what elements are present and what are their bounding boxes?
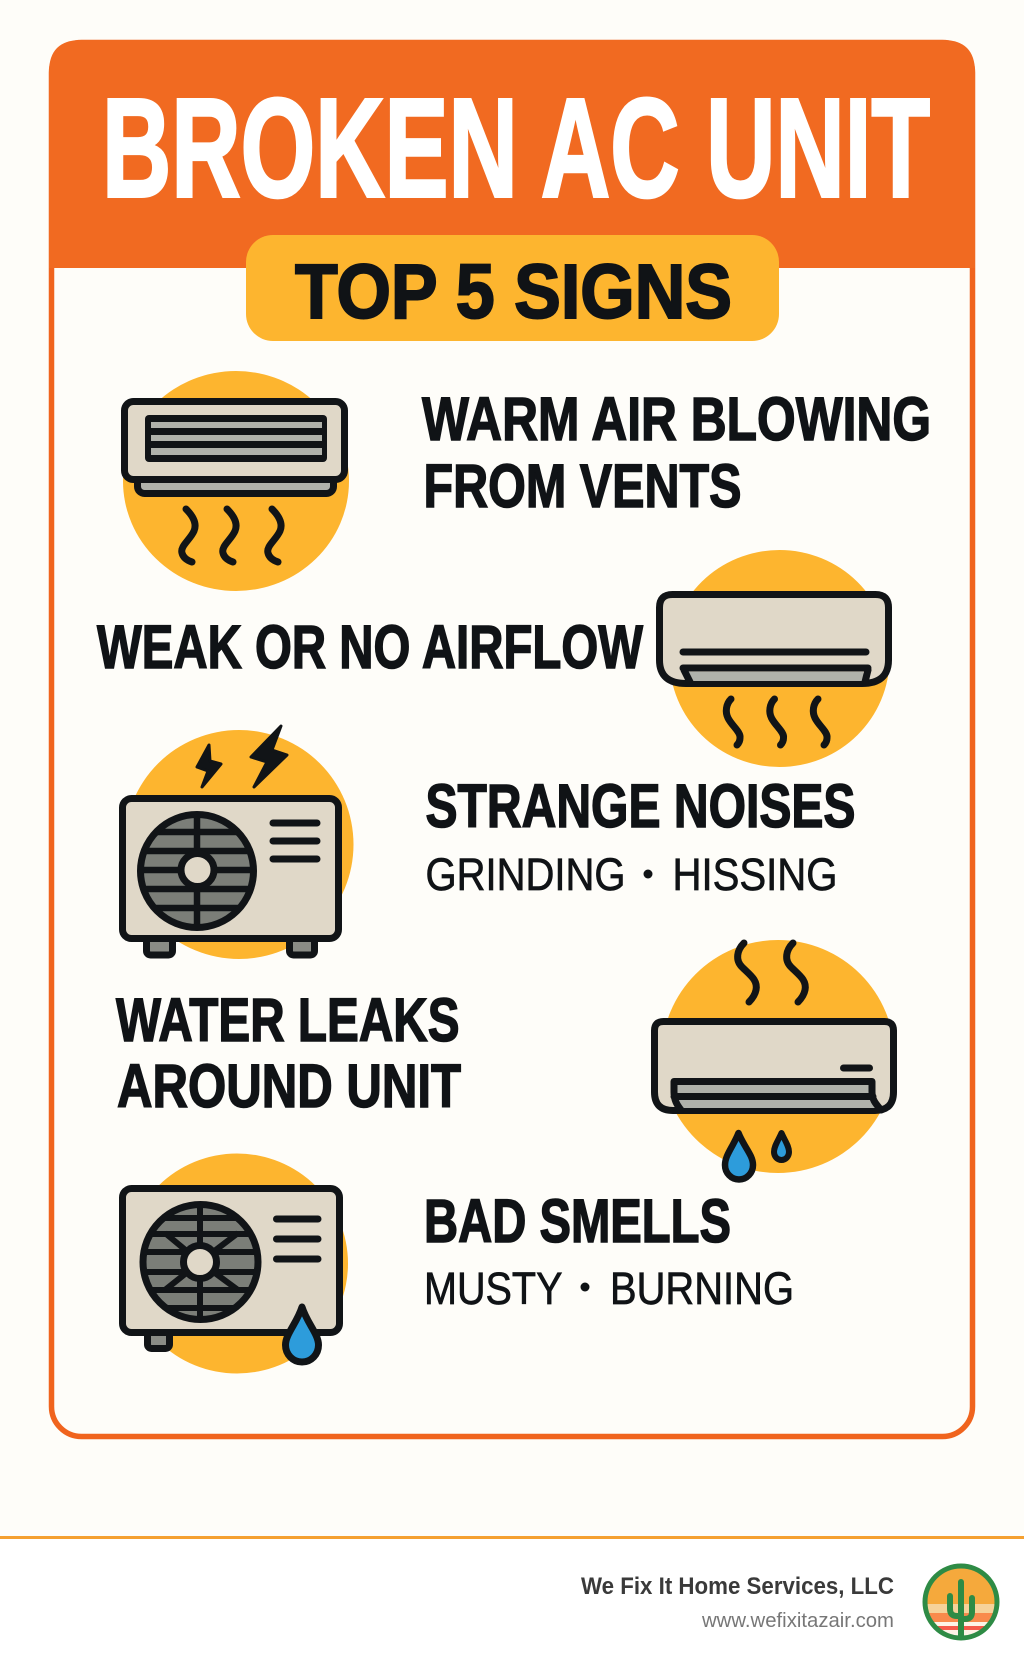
icon: outdoor unit with lightning — [122, 726, 354, 959]
subtitle pill — [246, 235, 779, 341]
detail: musty, burning — [424, 1263, 794, 1314]
icon: outdoor unit with drip — [122, 1154, 348, 1374]
heading: bad smells: BAD SMELLS — [424, 1187, 731, 1255]
detail: musty, burning: BURNING — [610, 1263, 794, 1314]
icon: indoor unit with weak airflow — [660, 550, 890, 767]
icon: indoor unit with leaks — [654, 940, 894, 1180]
heading: warm air: FROM VENTS — [424, 452, 742, 520]
detail: grinding, hissing: HISSING — [672, 849, 838, 900]
website: www.wefixitazair.com — [701, 1609, 894, 1632]
company name: We Fix It Home Services, LLC — [581, 1573, 894, 1600]
icon: cactus logo — [925, 1566, 997, 1639]
heading: warm air — [422, 385, 931, 520]
heading: water leaks: WATER LEAKS — [116, 986, 460, 1054]
detail: grinding, hissing: GRINDING — [426, 849, 626, 900]
icon: indoor unit with warm air — [123, 371, 349, 591]
heading: bad smells — [424, 1187, 794, 1314]
detail: musty, burning: MUSTY — [424, 1263, 562, 1314]
panel: main card — [49, 40, 975, 1436]
heading: strange noises: STRANGE NOISES — [426, 772, 856, 840]
heading: water leaks — [116, 986, 461, 1120]
footer — [0, 1536, 1024, 1640]
subtitle text: TOP 5 SIGNS — [295, 249, 732, 335]
heading: water leaks: AROUND UNIT — [117, 1052, 461, 1120]
heading: weak airflow: WEAK OR NO AIRFLOW — [97, 613, 643, 681]
heading: strange noises — [426, 772, 856, 900]
detail: grinding, hissing — [426, 849, 838, 900]
header band — [49, 40, 975, 268]
